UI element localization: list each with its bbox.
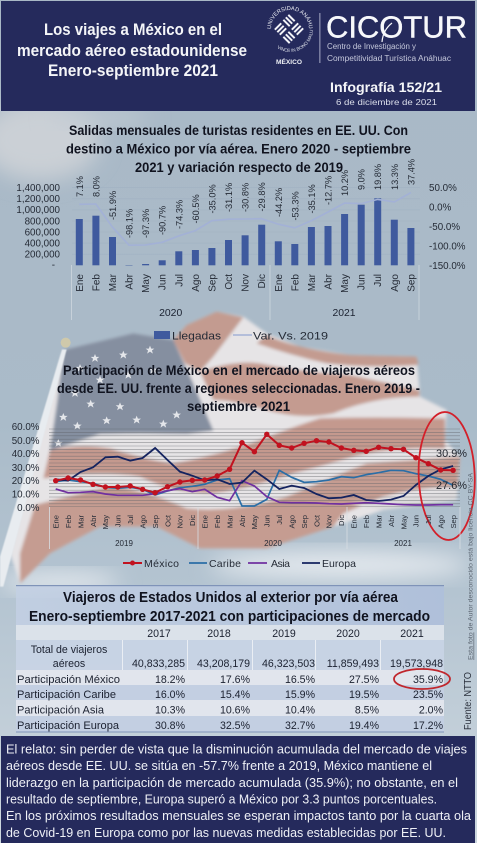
chart 1 title: 2021 y variación respecto de 2019 xyxy=(135,160,343,175)
year header row: 2019 xyxy=(272,628,296,640)
y axis: 30.0% xyxy=(12,463,40,474)
variation data labels: -29.8% xyxy=(257,182,267,212)
variation data labels: -74.3% xyxy=(174,200,184,229)
month axis: May xyxy=(340,274,351,293)
month axis: Sep xyxy=(207,274,218,292)
year labels xyxy=(115,539,412,548)
month axis: Ago xyxy=(436,515,446,529)
story text: de Covid-19 en Europa como por las nuevas medidas establecidas por EE. UU. xyxy=(6,825,446,840)
month axis: Ene xyxy=(274,274,285,292)
month axis: Mar xyxy=(374,515,383,528)
month axis: Ene xyxy=(200,515,210,529)
left axis: 1,200,000 xyxy=(16,194,61,205)
source, vertical: Fuente: NTTO xyxy=(463,672,474,730)
variation data labels: -35.0% xyxy=(207,184,217,214)
variation data labels: 10.2% xyxy=(340,170,350,196)
logo: CICOTUR: Centro de Investigación y xyxy=(327,42,416,51)
infographic number and date: 6 de diciembre de 2021 xyxy=(336,97,437,107)
month axis: Dic xyxy=(257,274,268,288)
month axis: Dic xyxy=(188,515,197,526)
variation data labels: -30.8% xyxy=(241,183,251,212)
story text: resultado de septiembre, Europa superó a México por 3.3 puntos porcentuales. xyxy=(6,792,437,806)
story text: liderazgo en la participación de mercado acumulada (35.9%); no obstante, en el xyxy=(6,775,458,790)
month axis: May xyxy=(250,515,259,529)
row: Asia: Participación Asia xyxy=(17,704,104,716)
variation data labels: -44.2% xyxy=(274,188,284,217)
y axis: 0.0% xyxy=(17,503,40,514)
header title: Enero-septiembre 2021 xyxy=(48,62,218,80)
row: total: 46,323,503 xyxy=(262,658,315,670)
chart 2 legend xyxy=(123,558,356,570)
left axis: 1,400,000 xyxy=(16,183,61,194)
year header row: 2020 xyxy=(336,628,360,640)
month axis: Nov xyxy=(241,274,252,292)
chart 1 legend: Llegadas xyxy=(172,330,222,342)
month axis: Jun xyxy=(263,515,272,527)
logo: CICOTUR: CICOTUR xyxy=(326,10,467,44)
row: México: Participación México xyxy=(17,674,120,686)
right axis: -50.0% xyxy=(429,222,460,233)
infographic number and date: Infografía 152/21 xyxy=(330,80,443,95)
bars: Llegadas xyxy=(76,198,414,265)
callout values: 27.6% xyxy=(436,480,467,492)
year header row: 2018 xyxy=(207,628,231,640)
line: México xyxy=(56,434,453,493)
table title: Viajeros de Estados Unidos al exterior por vía aérea xyxy=(63,589,399,606)
month axis: Abr xyxy=(124,273,136,290)
row: México xyxy=(17,674,444,686)
variation data labels: -53.3% xyxy=(290,191,300,220)
month axis: Jul xyxy=(424,515,433,525)
year labels: 2019 xyxy=(115,539,133,548)
variation data labels: 19.8% xyxy=(373,164,383,190)
callout values xyxy=(436,448,467,492)
photo credit, vertical: Esta foto de Autor desconocido está bajo licencia CC BY-SA xyxy=(468,473,474,660)
y axis: 60.0% xyxy=(12,422,40,433)
row: México: 18.2% xyxy=(155,674,186,686)
row: Europa: 30.8% xyxy=(155,720,186,732)
month axis: Mar xyxy=(307,273,318,291)
row: Caribe: Participación Caribe xyxy=(17,689,116,701)
year labels: 2021 xyxy=(332,308,356,319)
month axis: Mar xyxy=(225,515,234,528)
month axis: Jul xyxy=(373,274,384,287)
year labels: 2020 xyxy=(159,308,182,319)
month axis: Jun xyxy=(412,515,421,527)
row: Caribe xyxy=(17,689,444,701)
month axis: Jun xyxy=(158,274,168,290)
month axis: Abr xyxy=(387,515,396,527)
month axis: Ene xyxy=(350,515,359,529)
story text: aéreos desde EE. UU. se sitúa en -57.7% frente a 2019, México mantiene el xyxy=(6,758,432,773)
row: Caribe: 15.9% xyxy=(285,689,316,701)
month axis: Jul xyxy=(126,515,135,525)
variation data labels: -51.9% xyxy=(108,191,118,220)
chart 2 title: desde EE. UU. frente a regiones seleccionadas. Enero 2019 - xyxy=(57,381,420,396)
month axis: Oct xyxy=(163,514,172,527)
row: México: 17.6% xyxy=(220,674,251,686)
left axis: 400,000 xyxy=(25,238,61,250)
chart 1 title: Salidas mensuales de turistas residentes en EE. UU. Con xyxy=(69,123,408,138)
story panel xyxy=(1,736,475,843)
logo: Universidad Anáhuac México: MÉXICO xyxy=(276,57,302,66)
chart 2 legend: Caribe xyxy=(209,558,241,570)
header title xyxy=(17,21,247,80)
row: Caribe: 19.5% xyxy=(349,689,380,701)
variation data labels: 7.1% xyxy=(75,176,85,197)
row: Asia: 10.6% xyxy=(220,704,251,716)
left axis: - xyxy=(52,260,55,271)
row: total: 40,833,285 xyxy=(132,658,185,670)
row: Asia xyxy=(17,704,444,716)
month axis: Jun xyxy=(114,515,123,527)
month axis: Nov xyxy=(325,515,334,529)
chart 2 legend: Asia xyxy=(271,558,290,570)
table title: Enero-septiembre 2017-2021 con participaciones de mercado xyxy=(29,608,430,625)
row: Europa xyxy=(17,720,444,732)
month axis: Jul xyxy=(275,515,284,525)
month axis: Mar xyxy=(76,515,85,528)
row: Europa: 32.5% xyxy=(220,720,251,732)
variation data labels: -90.7% xyxy=(158,206,168,235)
row: Europa: 19.4% xyxy=(349,720,380,732)
row: Europa: Participación Europa xyxy=(17,720,119,732)
y axis: 10.0% xyxy=(12,490,40,500)
right axis xyxy=(429,183,466,272)
left axis: 600,000 xyxy=(25,227,61,238)
row: total: Total de viajeros xyxy=(31,644,107,656)
line: Europa xyxy=(56,448,453,501)
infographic number and date xyxy=(330,80,443,107)
variation data labels: -35.1% xyxy=(307,184,317,214)
row: total xyxy=(31,644,443,670)
story text: En los próximos resultados mensuales se esperan impactos tanto por la cuarta ola xyxy=(6,808,472,823)
month axis: Ago xyxy=(138,515,147,529)
month axis: Nov xyxy=(176,515,185,529)
callout: red ellipse xyxy=(416,411,477,541)
month axis xyxy=(75,273,417,293)
row: Europa: 17.2% xyxy=(413,720,444,732)
row: total: 43,208,179 xyxy=(197,658,250,670)
variation data labels: 8.0% xyxy=(92,176,102,197)
y axis: 40.0% xyxy=(12,449,40,460)
variation data labels xyxy=(75,159,416,238)
month axis: Abr xyxy=(324,273,334,290)
month axis: Sep xyxy=(406,274,417,292)
month axis: Ago xyxy=(390,274,401,292)
row: total: aéreos xyxy=(53,658,85,670)
stars xyxy=(54,346,181,447)
right axis: 50.0% xyxy=(429,183,457,194)
row: Asia: 8.5% xyxy=(355,704,380,716)
y axis: 20.0% xyxy=(12,476,40,487)
table bands xyxy=(16,585,444,732)
left axis: 200,000 xyxy=(25,250,61,261)
month axis: Feb xyxy=(92,274,102,291)
month axis: Oct xyxy=(224,274,235,290)
header title: mercado aéreo estadounidense xyxy=(17,42,247,60)
logo: Universidad Anáhuac México xyxy=(267,6,313,66)
chart 2 legend: Europa xyxy=(322,558,356,570)
y axis: 50.0% xyxy=(12,436,40,447)
logo: CICOTUR xyxy=(326,10,467,63)
right axis: 0.0% xyxy=(429,202,452,214)
chart 1 title xyxy=(66,123,411,175)
row: Asia: 2.0% xyxy=(419,704,444,716)
month axis: Mar xyxy=(108,273,119,291)
chart 1 legend xyxy=(154,330,328,342)
left axis: 800,000 xyxy=(25,216,61,227)
chart 2 title xyxy=(57,363,420,414)
row: Europa: 32.7% xyxy=(285,720,316,732)
variation data labels: -12.7% xyxy=(324,176,334,205)
header panel xyxy=(1,1,475,111)
month axis: Ago xyxy=(191,274,202,292)
y axis xyxy=(12,422,40,514)
row: Caribe: 15.4% xyxy=(220,689,251,701)
month axis: Feb xyxy=(362,515,371,528)
chart 1: monthly departures xyxy=(16,123,466,342)
month axis: Abr xyxy=(89,515,98,527)
header title: Los viajes a México en el xyxy=(44,21,222,39)
left axis xyxy=(16,183,61,271)
table title xyxy=(29,589,430,625)
line: Var. Vs. 2019 xyxy=(79,193,411,245)
callout: 35.9% red ellipse xyxy=(394,669,450,689)
year header row: 2021 xyxy=(400,628,424,640)
chart 2: market share xyxy=(12,363,477,570)
month axis: Jun xyxy=(357,274,368,290)
variation data labels: 9.0% xyxy=(357,169,367,190)
month axis: Ene xyxy=(52,515,60,529)
month axis: Sep xyxy=(151,515,160,529)
row: México: 27.5% xyxy=(349,674,380,686)
line: Caribe xyxy=(56,470,453,506)
month axis: May xyxy=(101,515,110,529)
row: México: 16.5% xyxy=(285,674,316,686)
row: Asia: 10.3% xyxy=(155,704,186,716)
variation data labels: -98.1% xyxy=(124,209,134,238)
year labels: 2020 xyxy=(264,539,282,548)
month axis: Ago xyxy=(288,515,296,529)
month axis: Feb xyxy=(213,515,222,528)
chart 2 title: Participación de México en el mercado de viajeros aéreos xyxy=(63,363,415,378)
month axis: Ene xyxy=(75,274,86,292)
flagpole xyxy=(0,349,67,587)
story text: El relato: sin perder de vista que la disminución acumulada del mercado de viajes xyxy=(6,742,467,756)
row: total: 11,859,493 xyxy=(327,658,379,670)
row: Caribe: 23.5% xyxy=(413,689,444,701)
month axis: Feb xyxy=(290,274,301,291)
month axis xyxy=(52,514,458,529)
canton xyxy=(50,333,213,451)
year labels: 2021 xyxy=(394,539,412,548)
variation data labels: 13.3% xyxy=(390,164,400,190)
month axis: Sep xyxy=(449,515,458,529)
story text xyxy=(6,742,472,840)
table: US air travellers abroad xyxy=(16,585,450,732)
left axis: 1,000,000 xyxy=(16,205,61,216)
year labels xyxy=(159,308,356,319)
variation data labels: -31.1% xyxy=(224,183,234,212)
month axis: Oct xyxy=(312,514,321,527)
variation data labels: 37.4% xyxy=(406,159,416,185)
chart 2 title: septiembre 2021 xyxy=(187,399,290,414)
month axis: May xyxy=(399,515,408,529)
row: Caribe: 16.0% xyxy=(155,689,186,701)
row: total: 19,573,948 xyxy=(390,658,443,670)
line: Asia xyxy=(56,481,453,505)
logo: CICOTUR: Competitividad Turística Anáhuac xyxy=(327,54,451,63)
month axis: Sep xyxy=(300,515,309,529)
base white of flag xyxy=(10,312,460,583)
year header row: 2017 xyxy=(147,628,171,640)
callout values: 30.9% xyxy=(436,448,467,460)
month axis: Dic xyxy=(337,515,346,526)
month axis: May xyxy=(141,274,152,293)
right axis: -100.0% xyxy=(429,242,466,252)
row: México: 35.9% xyxy=(413,674,444,686)
month axis: Abr xyxy=(238,515,247,527)
year header row xyxy=(147,628,424,640)
month axis: Feb xyxy=(64,515,73,528)
chart 1 legend: Var. Vs. 2019 xyxy=(253,330,328,342)
red stripes xyxy=(173,312,243,372)
right axis: -150.0% xyxy=(429,261,466,272)
row: Asia: 10.4% xyxy=(285,704,316,716)
month axis: Jul xyxy=(174,274,185,287)
variation data labels: -97.3% xyxy=(141,209,151,238)
chart 2 legend: México xyxy=(144,558,179,570)
chart 1 title: destino a México por vía aérea. Enero 2020 - septiembre xyxy=(66,142,411,156)
variation data labels: -60.5% xyxy=(191,194,201,224)
